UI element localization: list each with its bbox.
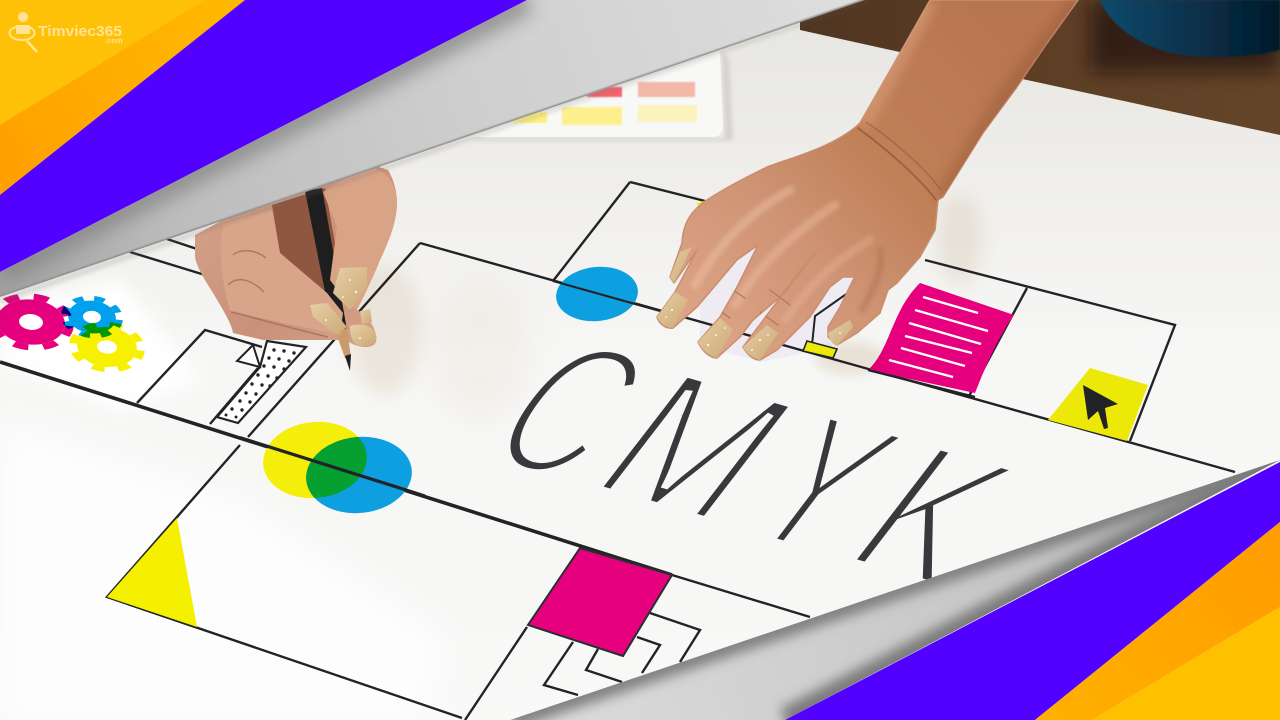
- hand shading: [695, 5, 1075, 325]
- CMYK hand-written heading: M: [557, 333, 835, 560]
- logo: Timviec365: [10, 12, 123, 52]
- logo domain: .com: [105, 36, 123, 45]
- grey fold: [510, 460, 1280, 720]
- thumb: [323, 168, 397, 310]
- gears icon: [0, 293, 143, 373]
- hand silhouette: [195, 165, 397, 347]
- folded corner: [237, 345, 260, 367]
- dark blue object: [1100, 0, 1280, 57]
- fold shadow: [0, 0, 875, 304]
- left hand holding pencil: [195, 165, 841, 371]
- orange band: [0, 0, 245, 195]
- grey fold: [0, 0, 865, 297]
- CMYK hand-written heading: [449, 304, 1054, 623]
- icon: logo person with magnifier: [10, 12, 37, 52]
- purple band: [0, 0, 527, 272]
- soft paper shadows: [347, 195, 982, 420]
- yellow corner: [0, 0, 245, 195]
- inner palm shadow: [272, 188, 340, 293]
- magenta document icon: [868, 283, 1014, 397]
- logo text: Timviec365: [38, 23, 122, 40]
- magenta square: [528, 548, 672, 656]
- card shadow: [470, 50, 733, 141]
- table background: [780, 0, 1280, 150]
- gear: magenta: [0, 293, 72, 351]
- yellow corner: [1092, 607, 1280, 720]
- nails: [657, 247, 853, 360]
- pencil: [305, 188, 351, 371]
- bottom-right corner fold: [510, 460, 1280, 720]
- blue ellipse: [553, 263, 660, 325]
- nail glitter: [325, 279, 841, 351]
- overlap: green: [306, 437, 367, 498]
- right hand and arm: [657, 0, 1078, 360]
- orange band: [1035, 522, 1280, 720]
- gear: blue: [63, 296, 121, 338]
- knuckle creases: [228, 251, 328, 337]
- yellow square with cursor arrow: [1048, 368, 1148, 441]
- object shadow: [1090, 0, 1280, 72]
- gear: yellow: [71, 321, 143, 373]
- CMYK hand-written heading: K: [811, 407, 1054, 623]
- line drawing wireframe: [0, 182, 1235, 720]
- icon: cursor arrow: [1083, 385, 1118, 429]
- document icon with dotted shape: [217, 341, 306, 423]
- CMYK hand-written heading: Y: [708, 376, 937, 591]
- CMYK hand-written heading: C: [449, 304, 689, 517]
- top-left corner fold: [0, 0, 875, 304]
- index finger: [221, 210, 343, 335]
- yellow shapes behind hand: [696, 200, 758, 250]
- whiter lower left paper: [0, 420, 450, 720]
- nails: [310, 267, 376, 346]
- hand silhouette: [657, 0, 1078, 360]
- venn diagram: yellow and blue circles: [240, 417, 425, 518]
- lilac drawing seen between fingers: [700, 240, 860, 362]
- yellow triangle: [107, 518, 197, 627]
- drawing between fingers: [803, 290, 852, 358]
- swatch card: [470, 50, 733, 141]
- purple band: [785, 462, 1280, 720]
